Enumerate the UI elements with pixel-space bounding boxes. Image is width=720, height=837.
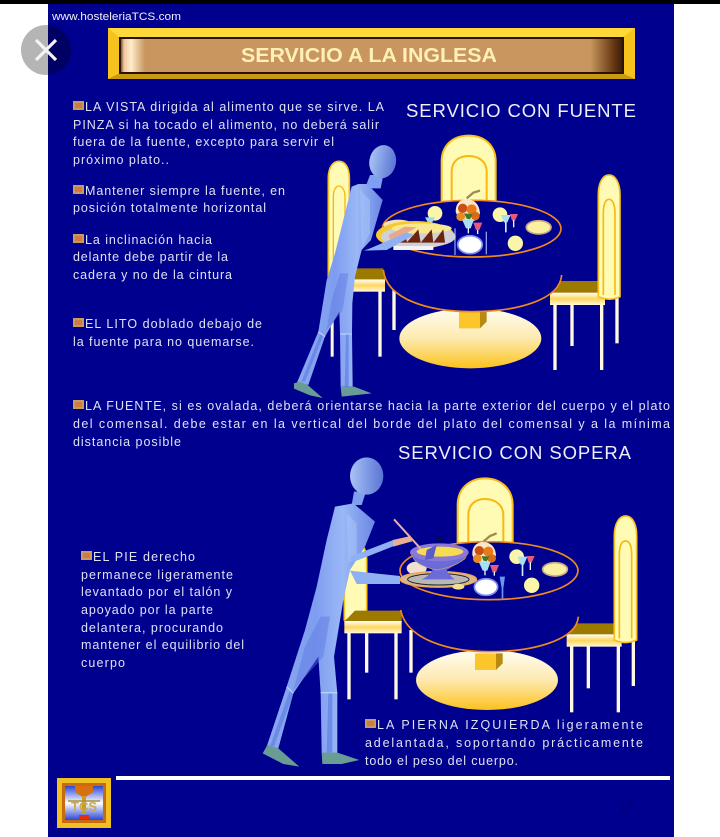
logo: TCS: TCS: [71, 799, 97, 814]
illustration: waiter serving from platter: [294, 136, 620, 398]
text block: el pie: EL PIE derecho: [93, 550, 195, 564]
text block: el pie: permanece ligeramente: [81, 568, 233, 582]
text block: el pie: delantera, procurando: [81, 621, 223, 635]
table setting: [425, 191, 551, 255]
table setting: [472, 533, 567, 598]
text block: el pie: apoyado por la parte: [81, 603, 213, 617]
text block: inclinacion: delante debe partir de la: [73, 250, 228, 264]
text block: el lito: [73, 317, 262, 349]
left chair: [328, 161, 396, 357]
waiter figure: [263, 457, 412, 767]
waiter figure: [294, 143, 399, 398]
text block: inclinacion: La inclinación hacia: [85, 233, 212, 247]
illustration: waiter serving from tureen: [263, 457, 637, 767]
top black bar: [0, 0, 720, 4]
heading: servicio con sopera: SERVICIO CON SOPERA: [398, 442, 632, 463]
left chair: [344, 542, 413, 699]
text block: la pierna izquierda: todo el peso del cuerpo.: [365, 754, 518, 768]
text block: inclinacion: cadera y no de la cintura: [73, 268, 232, 282]
text block: la pierna izquierda: adelantada, soportando prácticamente: [365, 736, 643, 750]
page number: 17: [620, 800, 634, 814]
text block: la vista: LA VISTA dirigida al alimento que se sirve. LA: [85, 100, 385, 114]
text block: la pierna izquierda: [365, 718, 643, 768]
platter with food: [364, 220, 456, 251]
text block: la vista: [73, 100, 385, 167]
round table: [400, 542, 578, 652]
text block: la fuente ovalada: distancia posible: [73, 435, 181, 449]
text block: el pie: cuerpo: [81, 656, 125, 670]
text block: la vista: PINZA si ha tocado el alimento, no deberá salir: [73, 118, 379, 132]
text block: la vista: próximo plato..: [73, 153, 169, 167]
text block: la vista: fuera de la fuente, excepto para servir el: [73, 135, 334, 149]
close button icon: [21, 25, 71, 75]
heading: servicio con fuente: SERVICIO CON FUENTE: [406, 100, 636, 121]
table base: [416, 650, 558, 710]
soup tureen on tray: [394, 519, 477, 590]
text block: el pie: [81, 550, 244, 670]
footer rule: [116, 776, 670, 780]
right chair: [550, 175, 620, 370]
center chair: [458, 478, 513, 543]
text block: el pie: levantado por el talón y: [81, 585, 233, 599]
text block: el pie: mantener el equilibrio del: [81, 638, 244, 652]
text block: mantener la fuente: posición totalmente horizontal: [73, 201, 266, 215]
right chair: [567, 516, 637, 712]
text block: mantener la fuente: [73, 184, 285, 215]
website url: www.hosteleriaTCS.com: [51, 11, 181, 23]
round table: [382, 200, 562, 312]
text block: la fuente ovalada: [73, 399, 670, 449]
text block: inclinacion: [73, 233, 232, 282]
text block: la fuente ovalada: del comensal. debe estar en la vertical del borde del plato del comensal y a la mínima: [73, 417, 670, 431]
title text: SERVICIO A LA INGLESA: [241, 45, 497, 67]
text block: mantener la fuente: Mantener siempre la fuente, en: [85, 184, 285, 198]
title banner: [108, 28, 635, 79]
text block: el lito: la fuente para no quemarse.: [73, 335, 254, 349]
text block: la pierna izquierda: LA PIERNA IZQUIERDA ligeramente: [377, 718, 643, 732]
center chair: [442, 136, 496, 202]
text block: la fuente ovalada: LA FUENTE, si es ovalada, deberá orientarse hacia la parte exterior del cuerpo y el plato: [85, 399, 670, 413]
logo: TCS: [57, 778, 111, 828]
text block: el lito: EL LITO doblado debajo de: [85, 317, 262, 331]
table base: [399, 308, 541, 368]
